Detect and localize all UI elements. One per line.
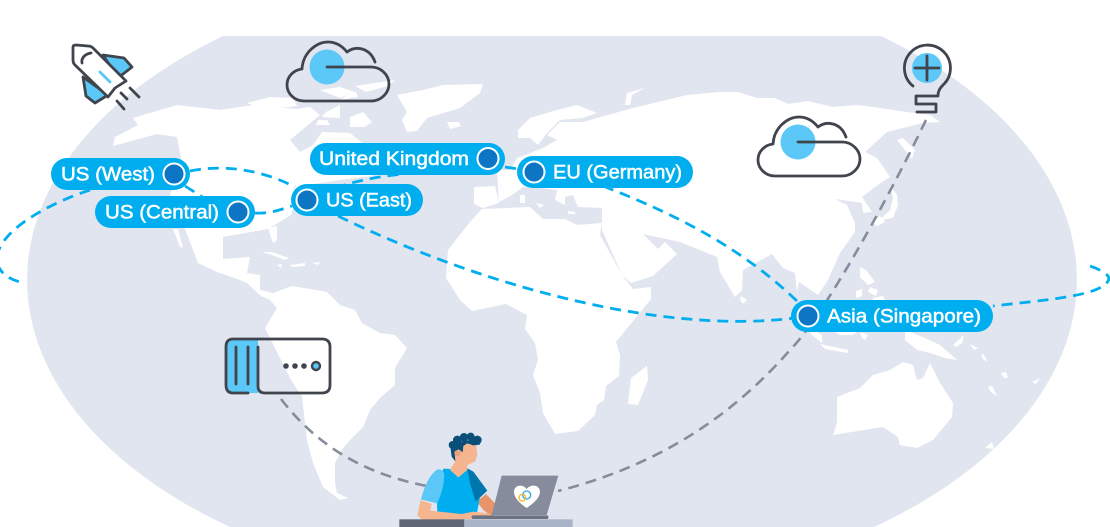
South America <box>260 286 407 500</box>
Borneo and Sulawesi <box>835 328 862 335</box>
pill: US (West) <box>51 158 190 190</box>
Cuba and Hispaniola <box>262 252 289 260</box>
Java <box>820 344 848 353</box>
pill: EU (Germany) <box>517 156 693 188</box>
Eurasia <box>474 92 940 297</box>
Iceland <box>447 122 461 129</box>
New Guinea <box>905 330 957 360</box>
icon: server <box>225 338 330 393</box>
icon: light bulb <box>904 45 950 112</box>
Australia <box>833 362 953 448</box>
dashed grey connection lines <box>281 120 926 491</box>
Sakhalin and Japan <box>897 138 915 159</box>
pill: US (East): US (East) <box>326 190 412 212</box>
pill: US (East) <box>291 184 423 216</box>
Sri Lanka <box>740 296 747 304</box>
person at laptop <box>399 433 573 527</box>
North and Central America <box>113 105 372 297</box>
pill: US (West): US (West) <box>61 164 155 186</box>
Africa <box>446 207 651 434</box>
icon: cloud right <box>758 117 860 176</box>
dashed blue network routes <box>0 167 1109 321</box>
Greenland <box>397 84 483 132</box>
pill: Asia (Singapore): Asia (Singapore) <box>827 306 981 328</box>
Arctic islands <box>247 97 297 110</box>
Sumatra <box>805 325 822 343</box>
Novaya Zemlya <box>625 88 645 105</box>
pill: United Kingdom: United Kingdom <box>319 149 469 170</box>
pill: EU (Germany): EU (Germany) <box>553 162 682 184</box>
Scandinavia <box>518 105 597 145</box>
pill: US (Central): US (Central) <box>105 202 219 224</box>
Mediterranean isles <box>520 195 525 203</box>
Madagascar <box>628 366 648 405</box>
Philippines <box>860 267 875 285</box>
pill: Asia (Singapore) <box>791 300 993 332</box>
pill: US (Central) <box>95 196 255 228</box>
Pacific islands <box>953 335 964 347</box>
icon: cloud left <box>287 42 389 101</box>
pill: United Kingdom <box>310 143 505 175</box>
Florida <box>268 226 277 243</box>
icon: rocket <box>73 45 139 109</box>
Baja California <box>173 229 183 248</box>
